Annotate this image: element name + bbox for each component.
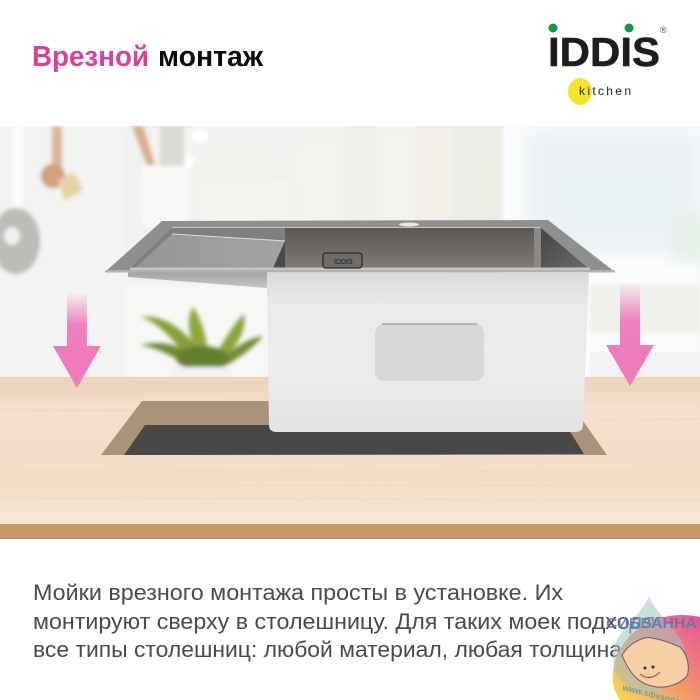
underside of drainboard bbox=[128, 272, 267, 288]
description text: Мойки врезного монтажа просты в установке. Их bbox=[33, 580, 564, 605]
logo: IDDIS kitchen: ® bbox=[660, 25, 667, 35]
logo: IDDIS kitchen: IDDIS bbox=[548, 29, 660, 75]
tap hole bbox=[399, 222, 419, 226]
utensil jar bbox=[132, 126, 208, 226]
brush bbox=[41, 126, 83, 201]
drainboard tray bbox=[133, 235, 285, 268]
description text: монтируют сверху в столешницу. Для таких моек подходят bbox=[33, 609, 666, 634]
description text bbox=[33, 580, 666, 662]
right arrow bbox=[606, 283, 654, 386]
watermark: SibVanna: СИБВАННА bbox=[606, 615, 697, 632]
sink bowl body bbox=[267, 273, 589, 432]
title: Врезной bbox=[32, 41, 149, 73]
description text: все типы столешниц: любой материал, любая толщина bbox=[33, 637, 622, 662]
watermark: SibVanna bbox=[606, 596, 700, 700]
IDDIS badge: IDDIS bbox=[334, 259, 353, 266]
plant bbox=[140, 307, 263, 381]
ladle bbox=[0, 126, 40, 274]
front rim highlight bbox=[130, 268, 590, 270]
countertop bbox=[0, 377, 700, 539]
title: монтаж bbox=[158, 41, 263, 73]
logo: IDDIS kitchen: kitchen bbox=[579, 84, 631, 98]
kitchen background photo bbox=[0, 126, 700, 381]
overflow plate bbox=[375, 324, 484, 381]
basin back wall bbox=[285, 228, 541, 268]
logo: IDDIS kitchen bbox=[548, 24, 667, 105]
IDDIS badge bbox=[323, 253, 362, 268]
sink bbox=[105, 220, 615, 432]
stacked bowls bbox=[197, 126, 375, 226]
left arrow bbox=[53, 292, 101, 388]
basin side walls bbox=[273, 241, 285, 268]
top rim bbox=[105, 220, 615, 272]
countertop cutout bbox=[101, 401, 607, 455]
